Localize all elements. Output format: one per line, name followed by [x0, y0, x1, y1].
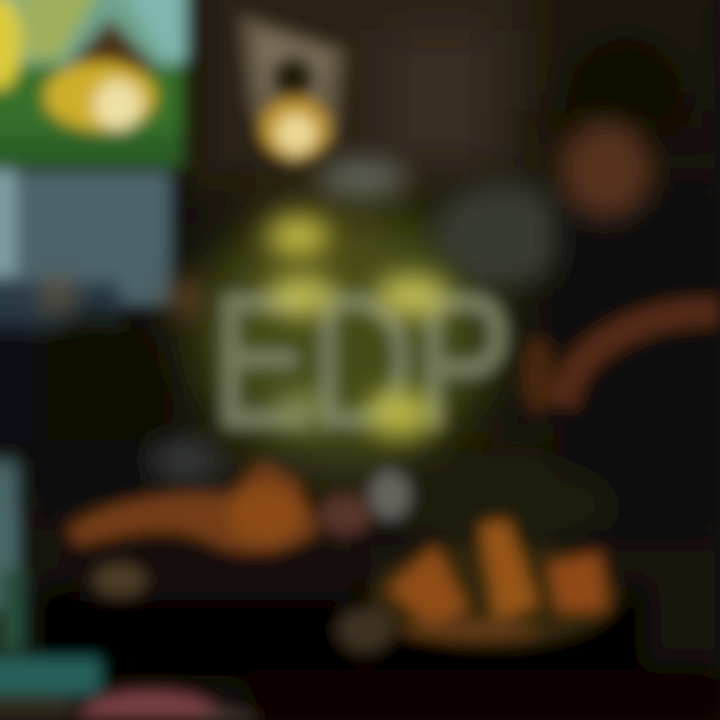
food: left plate	[68, 462, 410, 596]
dark figure on the left	[0, 315, 167, 510]
table surface	[40, 438, 720, 720]
yellow light spots	[268, 218, 448, 436]
grey blobs	[42, 160, 575, 316]
window: left grey panel	[0, 170, 170, 610]
person: face	[560, 120, 652, 220]
poster: centre lamp	[240, 15, 345, 165]
lettering: EDP: EDP	[212, 255, 512, 467]
food: right plate	[337, 520, 620, 652]
person on the right	[522, 40, 720, 530]
dark wall background	[190, 0, 720, 500]
person: torso and hat	[560, 40, 720, 530]
olive glow behind lettering	[195, 200, 495, 465]
person: arm	[522, 312, 720, 413]
poster: left landscape	[0, 0, 186, 167]
bottom-left colour patches	[0, 570, 258, 720]
